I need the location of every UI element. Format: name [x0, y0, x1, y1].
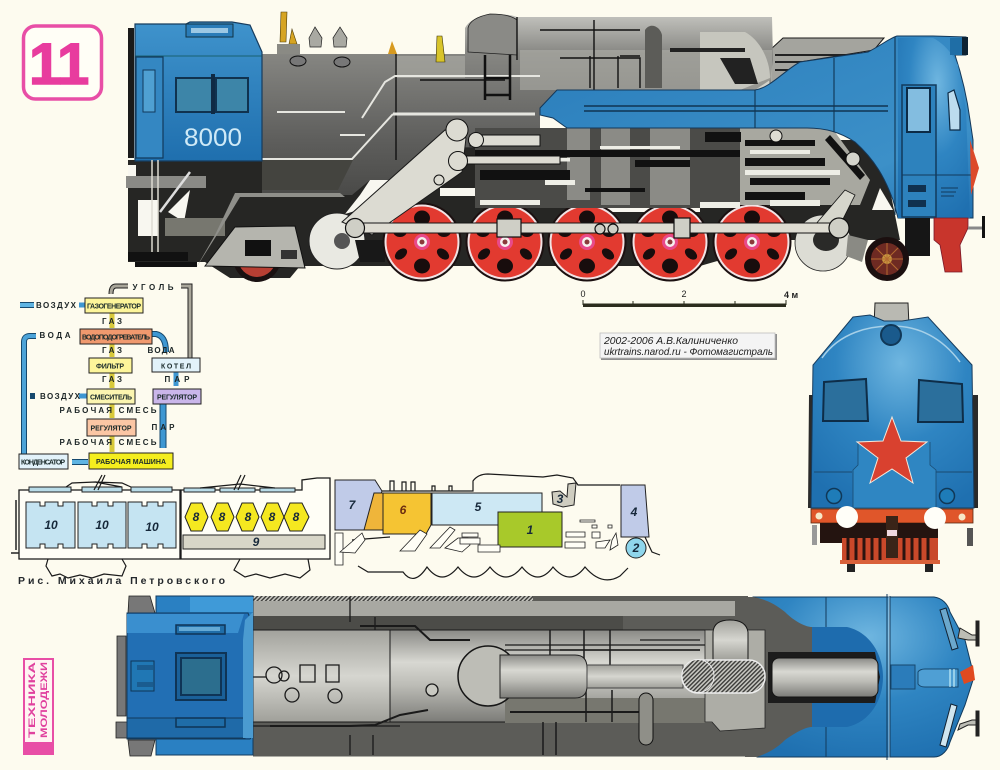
buffer beam [811, 509, 973, 523]
connection lines and break marks [66, 475, 275, 490]
orange section [364, 493, 383, 530]
side rod [350, 223, 835, 233]
red grille [840, 538, 940, 572]
blue streamlined shroud [540, 36, 973, 218]
lower vertical tank [639, 693, 653, 745]
motion machinery [470, 128, 870, 235]
flow diagram: ВОЗДУХ [36, 301, 77, 310]
compartment 4 [621, 485, 649, 537]
flow diagram: РЕГУЛЯТОР [90, 426, 132, 432]
labels 8: 8 [293, 510, 300, 524]
labels 8: 8 [245, 510, 252, 524]
cab details [128, 24, 262, 158]
flow diagram: ГАЗ [102, 317, 122, 326]
blue front lines [826, 594, 958, 760]
cab hatches [131, 625, 226, 727]
main diagonal arm [342, 130, 466, 235]
water tanks 10: 10 [95, 518, 109, 532]
labels 8: 8 [219, 510, 226, 524]
side steps [812, 525, 817, 545]
rear boiler fittings [277, 12, 445, 67]
under-cab gear and buffers [126, 160, 345, 268]
flow diagram: ПАР [164, 375, 190, 384]
shroud lines and door [584, 37, 972, 217]
crossheads [434, 119, 560, 185]
artist credit: Рис. Михаила Петровского [18, 575, 225, 587]
grey compartment 9 [183, 535, 325, 549]
credit box: ukrtrains.narod.ru - Фотомагистраль [604, 346, 773, 358]
small outline fragments [335, 520, 618, 565]
flow diagram: ГАЗОГЕНЕРАТОР [87, 304, 141, 310]
boiler rear [253, 630, 390, 722]
smokebox [768, 652, 880, 703]
tender wheel profiles [46, 559, 310, 578]
compartment 4: 4 [630, 505, 638, 519]
blue front section [740, 597, 973, 757]
top boiler details [247, 597, 705, 755]
cab bottom band [127, 718, 245, 738]
boiler and tender grey body [262, 14, 773, 195]
flow diagram: КОТЕЛ [161, 364, 191, 370]
cab band light [127, 614, 244, 633]
grey wheel disc rear [309, 213, 385, 269]
compartment 7: 7 [349, 498, 357, 512]
pilot and coupler [905, 216, 985, 272]
credit box [600, 333, 777, 360]
magazine logo: МОЛОДЕЖИ [39, 662, 49, 738]
under-tender band [262, 160, 353, 190]
rear cab blue [135, 22, 262, 161]
grey compartment 9: 9 [253, 535, 260, 549]
upper dark band [253, 616, 623, 630]
compartment 3: 3 [557, 492, 564, 506]
rear deflector behind shroud [770, 38, 884, 84]
compartment 3 [552, 483, 576, 507]
lower black frame [820, 523, 938, 543]
front view locomotive [808, 303, 978, 572]
credit box: 2002-2006 А.В.Калиниченко [603, 335, 738, 347]
compartment 2 [626, 538, 646, 558]
flow diagram: ВОДА [148, 346, 175, 355]
side view locomotive [126, 12, 985, 282]
headlights [836, 506, 858, 528]
rear blue tender [156, 596, 253, 755]
driving wheels [382, 202, 792, 282]
labels 8: 8 [193, 510, 200, 524]
flow diagram: РАБОЧАЯ СМЕСЬ [60, 406, 157, 415]
main cylinder [500, 655, 587, 698]
flow diagram: ВОЗДУХ [40, 392, 81, 401]
cab number: 8000 [184, 124, 242, 152]
flow diagram: ВОДА [40, 331, 71, 340]
compartment 6 [383, 493, 431, 534]
flow diagram: ГАЗ [102, 375, 122, 384]
pony wheel [865, 237, 909, 281]
boiler mid [390, 630, 710, 722]
flow diagram: ГАЗ [102, 346, 122, 355]
compartment 7 [335, 480, 382, 530]
pipes [20, 286, 190, 468]
rod joints [346, 218, 849, 238]
tender cutaway scheme [11, 474, 660, 580]
boiler upper highlight [395, 50, 772, 90]
cab roof [127, 613, 253, 739]
labels 8 [193, 510, 300, 524]
compartment 5 [432, 493, 542, 525]
narrow tube [587, 665, 683, 688]
central feedwater drum [645, 26, 662, 88]
front side plates [808, 395, 978, 508]
grey front transition [745, 597, 812, 757]
deflector slats [775, 55, 870, 70]
flow diagram: РАБОЧАЯ МАШИНА [96, 459, 166, 466]
tender top hatches [29, 487, 295, 492]
shroud front highlight [898, 38, 970, 218]
compartment 1 [498, 512, 562, 547]
scale bar [580, 289, 799, 307]
number badge [24, 26, 102, 99]
upper hatched edge [253, 596, 533, 601]
dome [468, 14, 517, 55]
tender light area [190, 597, 253, 612]
scale bar: 0 [580, 289, 586, 299]
flow diagram: ФИЛЬТР [96, 364, 124, 370]
feed dome [713, 620, 748, 660]
white gaps in frame [128, 147, 893, 236]
magazine logo: ТЕХНИКА [27, 661, 37, 738]
nose star [960, 665, 975, 684]
front buffers [958, 621, 979, 736]
red star [857, 417, 927, 483]
top view locomotive [116, 594, 979, 760]
rail bands [253, 601, 735, 616]
scale bar: 4 м [784, 290, 799, 300]
flow diagram: РАБОЧАЯ СМЕСЬ [60, 438, 157, 447]
scrap: lower running gear backdrop [128, 140, 900, 278]
locomotive outline [352, 474, 660, 580]
flow diagram [19, 283, 201, 469]
large round dome [458, 646, 518, 706]
flow diagram: ПАР [152, 423, 175, 432]
scale bar: 2 [681, 289, 687, 299]
grey machine body [253, 596, 748, 756]
compartment 6: 6 [400, 503, 407, 517]
roof arc [822, 326, 960, 362]
water tanks 10: 10 [44, 518, 58, 532]
boxes [85, 298, 143, 313]
front star profile [970, 140, 979, 195]
compartment 2: 2 [632, 541, 640, 555]
trailing truck wheel [205, 226, 305, 282]
lamps [881, 325, 901, 345]
compartment 5: 5 [475, 500, 482, 514]
number badge: 11 [29, 32, 88, 97]
handrail pipes [262, 76, 540, 159]
compartment 1: 1 [527, 523, 534, 537]
grey wheel disc front [795, 215, 868, 271]
coupler [886, 516, 898, 558]
steps on boiler [485, 55, 510, 100]
right tapered edge [243, 612, 253, 738]
fuel hexagons 8 [185, 503, 309, 531]
hatched chimney [682, 660, 765, 693]
magazine logo [24, 659, 53, 754]
labels 8: 8 [269, 510, 276, 524]
lower panel [505, 698, 715, 723]
label texts: УГОЛЬ [132, 283, 174, 292]
inner blue semicircle [812, 627, 883, 727]
windows [823, 379, 868, 421]
front panel [853, 442, 936, 508]
flow diagram: СМЕСИТЕЛЬ [90, 394, 132, 402]
water tanks 10: 10 [145, 520, 159, 534]
flow diagram: ВОДОПОДОГРЕВАТЕЛЬ [82, 334, 150, 342]
boiler lines [396, 17, 640, 160]
flow diagram: РЕГУЛЯТОР [157, 394, 197, 402]
casing around chimney [705, 630, 765, 731]
rear attachments [116, 596, 155, 756]
flow diagram: КОНДЕНСАТОР [21, 460, 65, 466]
front cab shell [811, 315, 974, 508]
chimney [874, 303, 909, 326]
water tanks 10 [26, 502, 176, 548]
